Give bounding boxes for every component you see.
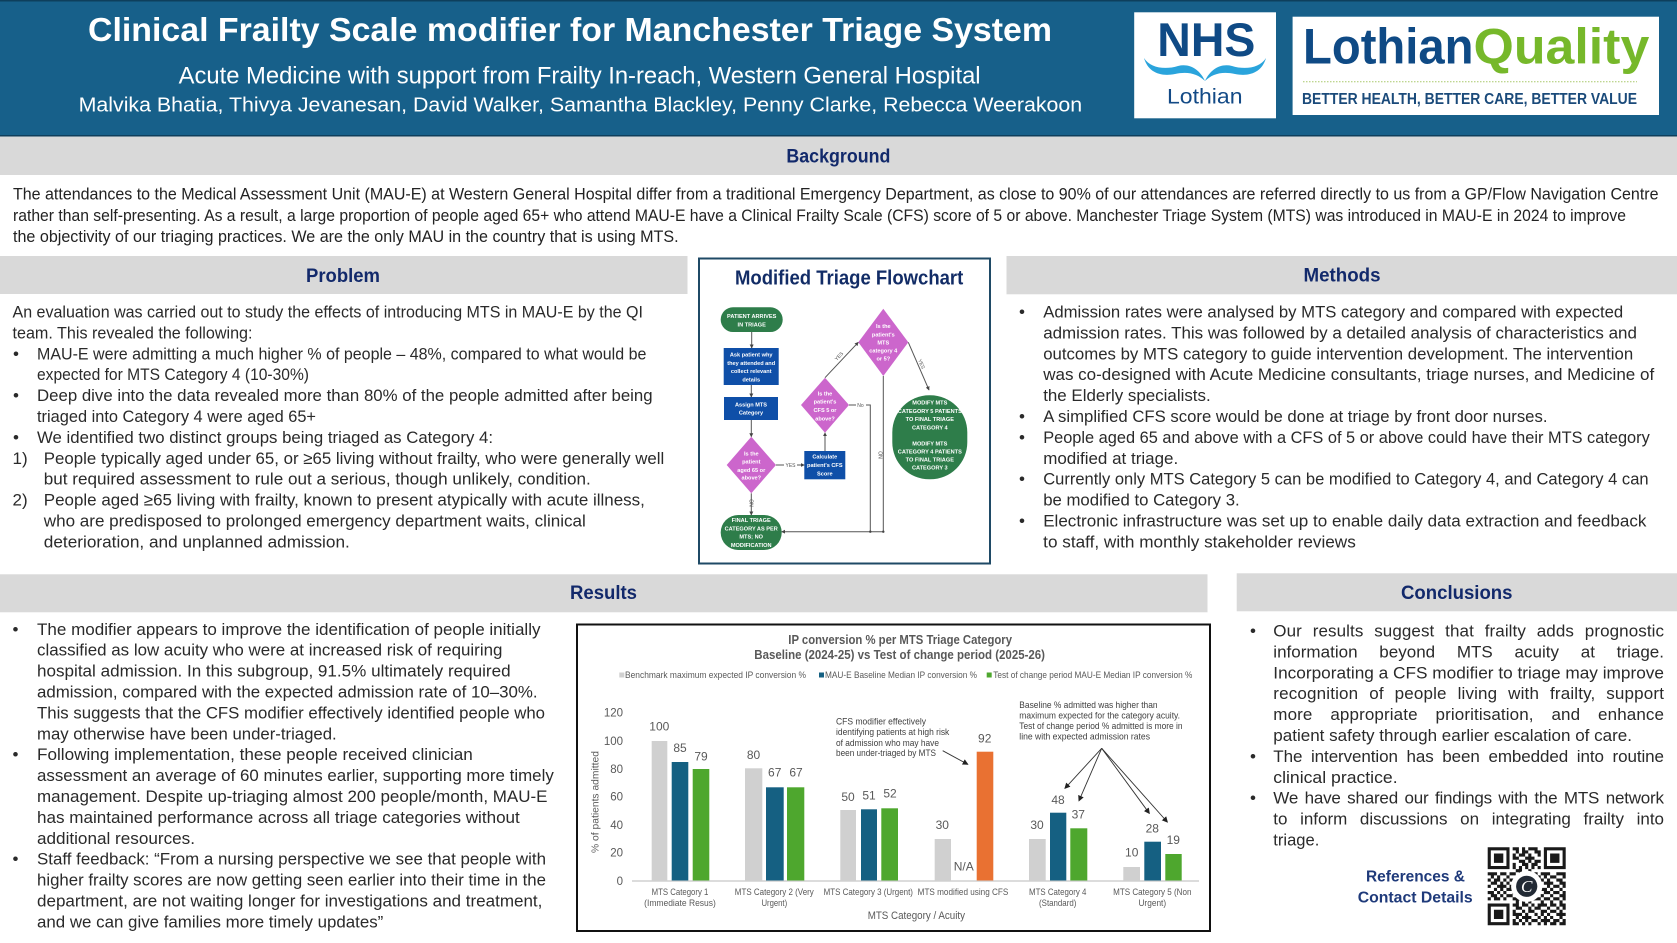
problem text: An evaluation was carried out to study the effects of introducing MTS in MAU-E by the QI <box>12 302 643 322</box>
bars: modified using CFS: 30 <box>936 818 949 832</box>
node: MTS category decision: or 5? <box>876 356 891 362</box>
problem text: triaged into Category 4 were aged 65+ <box>37 407 316 426</box>
node: CFS decision: Is the <box>818 391 832 397</box>
bars: category 4: 37 <box>1072 807 1085 821</box>
bars: category 1: 100 <box>649 720 670 734</box>
conclusions text: patient safety through earlier escalation of care. <box>1273 726 1632 745</box>
bars: category 3: 52 <box>883 787 897 801</box>
flowchart connectors: YES <box>916 358 926 371</box>
results text: assessment an average of 60 minutes earlier, supporting more timely <box>37 766 554 785</box>
category labels: (Standard) <box>1039 898 1076 909</box>
conclusions text: clinical practice. <box>1273 768 1398 787</box>
results text: Following implementation, these people received clinician <box>37 745 473 764</box>
bars: category 3: 51 <box>862 788 876 802</box>
problem text: but required assessment to rule out a serious, though unlikely, condition. <box>44 470 591 489</box>
node: assign MTS category <box>724 397 778 420</box>
methods text: Electronic infrastructure was set up to enable daily data extraction and feedback <box>1043 512 1647 530</box>
bars: category 2 <box>745 748 804 880</box>
subtitle: Acute Medicine with support from Frailty In-reach, Western General Hospital <box>179 62 981 90</box>
methods text: admission rates. This was followed by a detailed analysis of characteristics and <box>1043 323 1637 342</box>
node: ask patient <box>724 348 779 385</box>
problem text: We identified two distinct groups being triaged as Category 4: <box>37 428 493 447</box>
methods text: Currently only MTS Category 5 can be modified to Category 4, and Category 4 can <box>1043 470 1649 489</box>
icon: QR code <box>1488 847 1566 925</box>
conclusions text: Incorporating a CFS modifier to triage may improve <box>1273 663 1664 682</box>
results text: higher frailty scores are now getting seen earlier into their time in the <box>37 871 546 890</box>
flowchart connectors: NO <box>878 451 884 459</box>
node: MTS category decision: MTS <box>877 340 889 346</box>
results text: additional resources. <box>37 829 195 848</box>
bars: category 4: 30 <box>1030 818 1044 832</box>
methods text: outcomes by MTS category to guide intervention development. The intervention <box>1043 344 1633 363</box>
conclusions text: • <box>1250 622 1256 640</box>
y axis: 20 <box>610 848 623 860</box>
results text: The modifier appears to improve the identification of people initially <box>37 620 541 639</box>
conclusions text: recognition of people living with frailty, support <box>1273 684 1664 703</box>
background text <box>13 184 1658 246</box>
node: modify category: CATEGORY 5 PATIENTS <box>898 409 962 415</box>
category labels: MTS Category 3 (Urgent) <box>824 887 913 898</box>
bars: category 1: 85 <box>673 741 687 755</box>
problem text: 2) <box>12 491 28 510</box>
node: modify category: TO FINAL TRIAGE <box>906 458 954 464</box>
node: calculate CFS: Calculate <box>812 455 837 461</box>
conclusions text: more appropriate prioritisation, and enhance <box>1273 705 1664 724</box>
panel: methods <box>1006 256 1677 551</box>
conclusions text: information beyond MTS acuity at triage. <box>1273 642 1664 661</box>
x axis title: MTS Category / Acuity <box>868 910 965 922</box>
problem text: People aged ≥65 living with frailty, known to present atypically with acute illness, <box>44 491 645 510</box>
y axis: 100 <box>604 736 623 748</box>
header banner <box>0 0 1677 136</box>
node: modify category: TO FINAL TRIAGE <box>906 417 954 423</box>
node: aged 65 decision: above? <box>742 476 762 482</box>
problem text <box>12 302 664 551</box>
logo: Lothian Quality <box>1293 17 1659 115</box>
y axis: % of patients admitted <box>590 751 602 853</box>
flowchart connectors: YES <box>834 350 846 362</box>
methods text: to staff, with monthly stakeholder reviews <box>1043 532 1356 551</box>
annotation: CFS modifier: been under-triaged by MTS <box>836 748 936 759</box>
category labels: MTS Category 1 <box>652 887 708 898</box>
conclusions text: Our results suggest that frailty adds prognostic <box>1273 622 1664 640</box>
node: final triage category: CATEGORY AS PER <box>725 527 778 533</box>
category labels: MTS Category 4 <box>1029 887 1086 898</box>
methods text: People aged 65 and above with a CFS of 5 or above could have their MTS category <box>1043 428 1650 447</box>
annotation: baseline admitted: maximum expected for the category acuity. <box>1019 710 1180 722</box>
category labels: MTS Category 2 (Very <box>735 887 814 898</box>
conclusions text: The intervention has been embedded into routine <box>1273 747 1664 766</box>
node: ask patient: Ask patient why <box>730 352 773 358</box>
bars: category 5: 28 <box>1146 821 1159 835</box>
node: patient arrives <box>721 307 783 332</box>
problem text: • <box>13 386 19 405</box>
problem text: 1) <box>12 449 28 468</box>
category labels: (Immediate Resus) <box>644 898 716 909</box>
node: calculate CFS: patient's CFS <box>807 463 843 469</box>
y axis: 80 <box>610 764 623 776</box>
title: Clinical Frailty Scale modifier for Manchester Triage System <box>88 11 1052 48</box>
problem text: • <box>13 344 19 363</box>
heading: conclusions: Conclusions <box>1401 583 1512 604</box>
node: patient arrives: PATIENT ARRIVES <box>727 314 777 320</box>
bars: category 5 <box>1123 821 1182 880</box>
problem text: team. This revealed the following: <box>12 323 252 342</box>
methods text: A simplified CFS score would be done at triage by front door nurses. <box>1043 407 1548 426</box>
conclusions text: • <box>1250 747 1256 766</box>
y axis: 0 <box>617 876 623 888</box>
references and contact details: Contact Details <box>1358 889 1473 906</box>
background text: the objectivity of our triaging practices. We are the only MAU in the country that is using MTS. <box>13 227 679 246</box>
panel: problem <box>0 256 688 551</box>
bars: category 3 <box>840 787 898 880</box>
category labels: MTS Category 5 (Non <box>1113 887 1191 898</box>
node: MTS category decision: category 4 <box>869 349 898 355</box>
node: calculate CFS: Score <box>817 471 833 477</box>
conclusions text: to inform discussions on integrating frailty into <box>1273 810 1664 829</box>
annotation: CFS modifier: identifying patients at high risk <box>836 727 950 738</box>
panel: background <box>0 136 1677 246</box>
node: ask patient: details <box>742 377 760 383</box>
category labels: MTS modified using CFS <box>918 887 1008 898</box>
chart legend <box>619 670 1193 681</box>
bars: category 4: 48 <box>1051 793 1065 807</box>
results text: management. Despite up-triaging almost 200 people/month, MAU-E <box>37 787 548 806</box>
problem text: who are predisposed to prolonged emergency department waits, clinical <box>43 512 586 530</box>
node: aged 65 decision <box>727 437 776 493</box>
authors: Malvika Bhatia, Thivya Jevanesan, David Walker, Samantha Blackley, Penny Clarke, Rebecca Weerakoon <box>79 94 1082 116</box>
panel: results <box>0 574 1210 931</box>
annotation: baseline admitted: Baseline % admitted was higher than <box>1019 700 1158 711</box>
node: aged 65 decision: aged 65 or <box>737 468 766 474</box>
node: CFS decision: patient's <box>814 400 836 406</box>
results text: has maintained performance across all triage categories without <box>37 808 520 827</box>
methods text: modified at triage. <box>1043 449 1178 468</box>
bars: category 5: 10 <box>1125 845 1139 859</box>
results text: • <box>12 850 18 869</box>
y axis: 120 <box>604 708 623 720</box>
node: modify category: MODIFY MTS <box>912 441 948 447</box>
logo: Lothian Quality: Quality <box>1474 18 1649 74</box>
chart legend: MAU-E Baseline Median IP conversion % <box>825 670 977 681</box>
bars: category 5: 19 <box>1167 833 1180 847</box>
logo: NHS Lothian <box>1134 12 1276 118</box>
node: final triage category <box>721 515 782 550</box>
bars: category 1 <box>649 720 709 880</box>
node: modify category: CATEGORY 4 <box>912 425 949 431</box>
panel: modified triage flowchart <box>699 258 990 564</box>
results text: • <box>12 620 18 639</box>
flowchart connectors: YES <box>785 463 796 469</box>
problem text: expected for MTS Category 4 (10-30%) <box>37 365 309 384</box>
y axis: 60 <box>610 792 623 804</box>
problem text: MAU-E were admitting a much higher % of people – 48%, compared to what would be <box>37 344 646 363</box>
methods text: be modified to Category 3. <box>1043 491 1240 510</box>
node: final triage category: MODIFICATION <box>731 543 772 549</box>
annotation: CFS modifier: CFS modifier effectively <box>836 716 926 728</box>
methods text: was co-designed with Acute Medicine consultants, triage nurses, and Medicine of <box>1042 365 1654 384</box>
node: MTS category decision: patient's <box>872 332 895 338</box>
methods text: • <box>1019 407 1025 426</box>
references and contact details <box>1358 869 1473 906</box>
logo: NHS Lothian: Lothian <box>1167 85 1242 108</box>
category labels <box>644 887 1191 909</box>
y axis <box>590 708 623 888</box>
results text: and we can give families more timely updates” <box>37 912 384 931</box>
icon: QR code: C <box>1521 877 1533 896</box>
node: CFS decision <box>801 378 849 433</box>
category labels: Urgent) <box>1138 898 1166 909</box>
chart title <box>754 633 1045 662</box>
chart title: Baseline (2024-25) vs Test of change period (2025-26) <box>754 648 1045 662</box>
annotation: baseline admitted <box>1019 700 1183 822</box>
node: modify category: CATEGORY 3 <box>912 466 948 472</box>
bars: modified using CFS: 92 <box>978 731 992 745</box>
chart legend: Benchmark maximum expected IP conversion % <box>625 670 806 681</box>
bars: modified using CFS: N/A <box>954 860 974 874</box>
annotation: baseline admitted: Test of change period % admitted is more in <box>1019 721 1183 732</box>
flowchart connectors: NO <box>749 499 755 507</box>
results text: • <box>12 745 18 764</box>
node: aged 65 decision: Is the <box>744 451 759 457</box>
results text <box>12 620 554 931</box>
annotation: CFS modifier: of admission who may have <box>836 738 939 749</box>
node: aged 65 decision: patient <box>742 460 761 466</box>
conclusions text: • <box>1250 789 1256 808</box>
heading: results: Results <box>570 583 637 604</box>
heading: problem: Problem <box>306 266 380 287</box>
node: CFS decision: above? <box>815 416 835 422</box>
problem text: People typically aged under 65, or ≥65 living without frailty, who were generally well <box>44 449 664 468</box>
category labels: Urgent) <box>761 898 787 909</box>
results text: Staff feedback: “From a nursing perspective we see that people with <box>37 850 546 869</box>
node: patient arrives: IN TRIAGE <box>738 323 766 329</box>
bars: category 2: 80 <box>747 748 760 762</box>
node: assign MTS category: Assign MTS <box>735 402 767 408</box>
node: modify category: CATEGORY 4 PATIENTS <box>898 450 962 456</box>
results text: hospital admission. In this subgroup, 91.5% ultimately required <box>37 662 511 681</box>
bars: modified using CFS <box>935 731 993 880</box>
methods text: • <box>1019 428 1025 447</box>
annotation: baseline admitted: line with expected admission rates <box>1019 732 1150 742</box>
node: MTS category decision <box>858 309 908 376</box>
bar chart: IP conversion per MTS category <box>577 624 1210 931</box>
methods text: • <box>1019 302 1025 322</box>
node: calculate CFS <box>804 451 845 479</box>
heading: methods: Methods <box>1304 266 1380 286</box>
problem text: • <box>13 428 19 447</box>
node: ask patient: they attended and <box>727 361 776 367</box>
references and contact details: References & <box>1366 869 1465 886</box>
logo: NHS Lothian: NHS <box>1157 13 1255 66</box>
bars: category 4 <box>1029 793 1087 880</box>
y axis: 40 <box>610 820 623 832</box>
bars: category 3: 50 <box>841 790 855 804</box>
conclusions text <box>1250 622 1664 850</box>
conclusions text: We have shared our findings with the MTS network <box>1273 789 1664 808</box>
node: modify category <box>892 395 967 479</box>
chart title: IP conversion % per MTS Triage Category <box>788 633 1012 647</box>
conclusions text: triage. <box>1273 830 1319 850</box>
logo: Lothian Quality: BETTER HEALTH, BETTER CARE, BETTER VALUE <box>1302 91 1637 108</box>
chart legend: Test of change period MAU-E Median IP conversion % <box>993 670 1193 681</box>
methods text: the Elderly specialists. <box>1043 386 1211 405</box>
heading: background: Background <box>786 146 890 168</box>
flowchart connectors: No <box>857 403 864 409</box>
node: modify category: MODIFY MTS <box>912 400 948 406</box>
bars: category 1: 79 <box>694 750 708 764</box>
logo: Lothian Quality: Lothian <box>1303 18 1474 74</box>
results text: may otherwise have been under-triaged. <box>37 724 337 743</box>
methods text <box>1019 302 1654 551</box>
methods text: • <box>1019 470 1025 489</box>
problem text: Deep dive into the data revealed more than 80% of the people admitted after being <box>37 386 653 405</box>
node: ask patient: collect relevant <box>731 369 772 375</box>
bars: category 2: 67 <box>768 766 782 780</box>
results text: classified as low acuity who were at increased risk of requiring <box>37 641 502 660</box>
results text: This suggests that the CFS modifier effectively identified people who <box>37 703 545 722</box>
node: final triage category: MTS; NO <box>739 535 764 541</box>
methods text: Admission rates were analysed by MTS category and compared with expected <box>1043 302 1623 322</box>
results text: department, are not waiting longer for investigations and treatment, <box>37 892 542 910</box>
results text: admission, compared with the expected admission rate of 10–30%. <box>37 682 538 702</box>
flowchart connectors <box>749 332 929 533</box>
bars: category 2: 67 <box>789 766 803 780</box>
node: CFS decision: CFS 5 or <box>813 408 837 414</box>
flowchart heading: Modified Triage Flowchart <box>735 268 964 290</box>
annotation: CFS modifier <box>836 716 968 764</box>
node: final triage category: FINAL TRIAGE <box>732 518 771 524</box>
problem text: deterioration, and unplanned admission. <box>44 532 350 551</box>
node: MTS category decision: Is the <box>876 324 891 330</box>
node: assign MTS category: Category <box>739 411 764 417</box>
methods text: • <box>1019 512 1025 530</box>
panel: conclusions <box>1237 573 1677 925</box>
